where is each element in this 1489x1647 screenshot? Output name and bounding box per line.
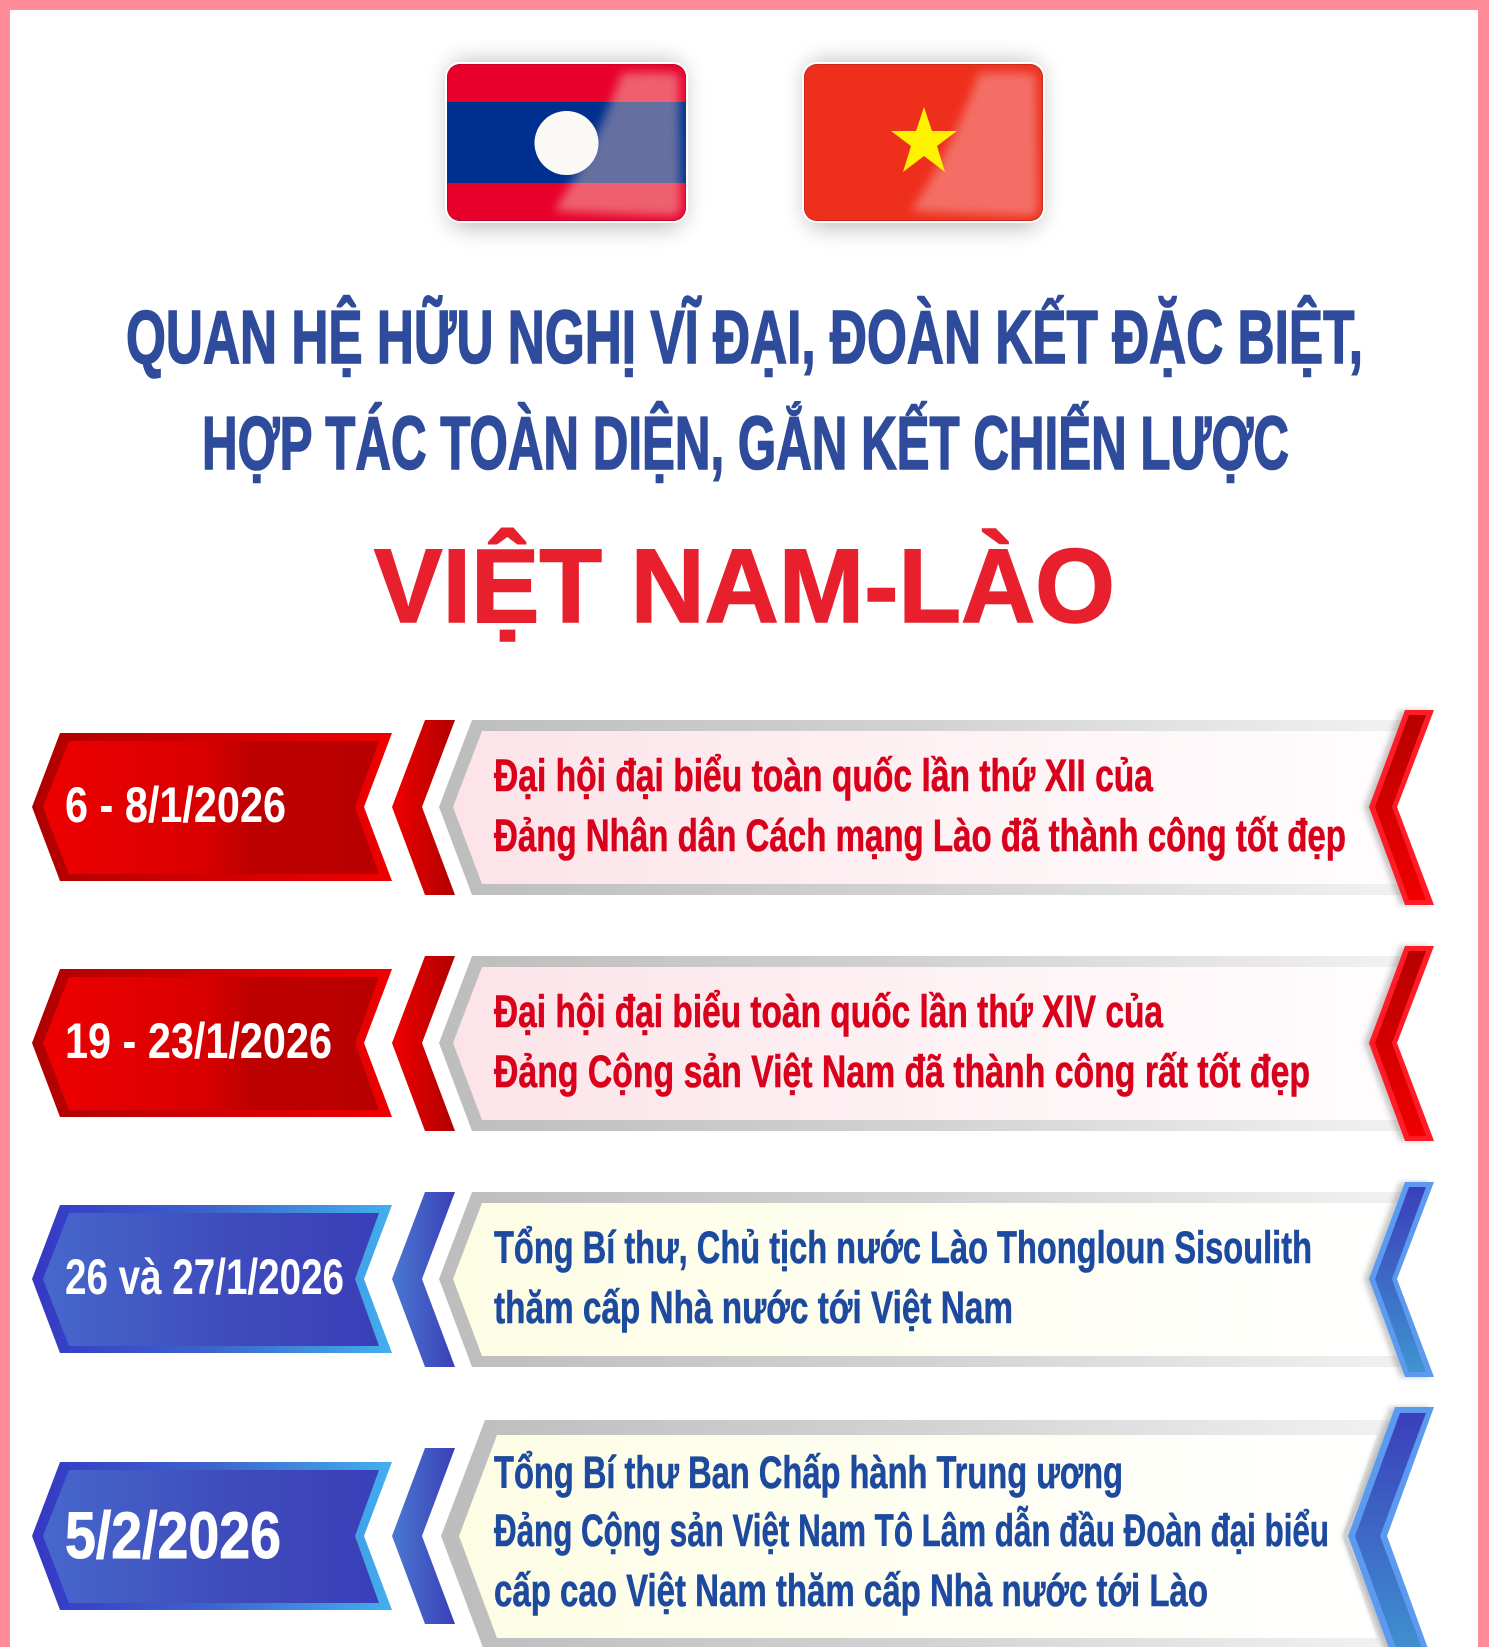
description 4: Tổng Bí thư Ban Chấp hành Trung ương [494,1447,1123,1498]
date 2: 19 - 23/1/2026 [65,1013,332,1069]
description 4: cấp cao Việt Nam thăm cấp Nhà nước tới Lào [494,1565,1208,1616]
row 1: Lao Party congress [32,710,1434,905]
right chevron 1 [1369,710,1434,905]
description 1: Đại hội đại biểu toàn quốc lần thứ XII của [494,750,1154,801]
description 2: Đại hội đại biểu toàn quốc lần thứ XIV của [494,986,1164,1037]
small chevron 3 [392,1192,455,1367]
title [126,295,1363,645]
text panel 3 [439,1192,1410,1367]
right chevron 2 [1369,946,1434,1141]
small chevron 2 [392,956,455,1131]
row 2: Vietnam Party congress [32,946,1434,1141]
description 3: thăm cấp Nhà nước tới Việt Nam [494,1282,1013,1333]
text panel 4 [441,1420,1395,1647]
row 3: Lao leader state visit [32,1182,1434,1377]
text panel 2 [439,956,1410,1131]
description 1 [494,750,1346,861]
right chevron 4 [1348,1407,1434,1647]
small chevron 1 [392,720,455,895]
date tag 4 [32,1462,392,1610]
date 1: 6 - 8/1/2026 [65,777,286,833]
description 4 [494,1447,1329,1616]
small chevron 4 [392,1448,455,1624]
description 3 [494,1222,1312,1333]
description 2 [494,986,1310,1097]
icon: Laos flag [445,62,688,227]
icon: Vietnam flag [802,62,1045,227]
date tag 1 [32,733,392,881]
right chevron 3 [1369,1182,1434,1377]
row 4: Vietnam leader state visit [32,1407,1434,1647]
date 4: 5/2/2026 [65,1498,281,1572]
date tag 3 [32,1205,392,1353]
date tag 2 [32,969,392,1117]
title: VIỆT NAM-LÀO [374,527,1115,645]
date 3: 26 và 27/1/2026 [65,1249,344,1305]
text panel 1 [439,720,1410,895]
